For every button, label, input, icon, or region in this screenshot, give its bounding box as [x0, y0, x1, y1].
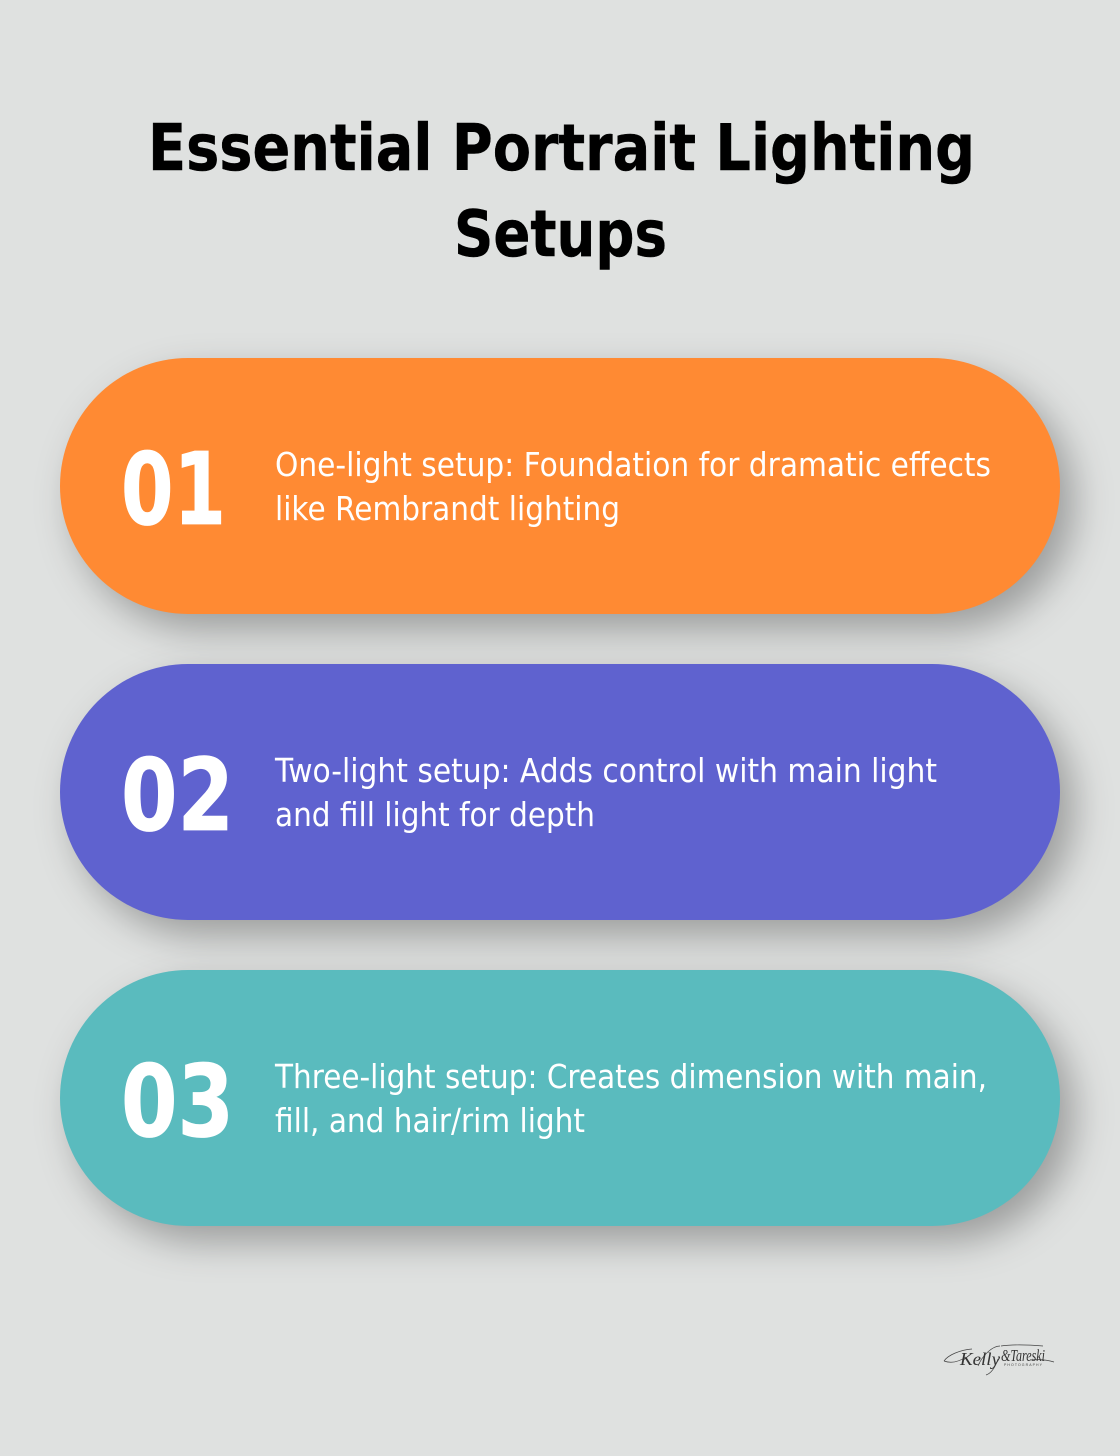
description: one-light setup: like Rembrandt lighting	[275, 489, 620, 528]
panel: two-light setup	[60, 664, 1074, 936]
description: two-light setup: and fill light for depth	[275, 795, 595, 834]
description: one-light setup	[275, 445, 991, 528]
panel: one-light setup	[60, 358, 1074, 630]
number 02: 02	[121, 737, 234, 854]
description: one-light setup: One-light setup: Foundation for dramatic effects	[275, 445, 991, 484]
logo: signature: PHOTOGRAPHY	[1004, 1363, 1043, 1367]
description: three-light setup: Three-light setup: Creates dimension with main,	[274, 1057, 987, 1096]
description: three-light setup: fill, and hair/rim light	[275, 1101, 585, 1140]
title	[148, 112, 975, 272]
logo: signature	[944, 1345, 1054, 1375]
title: Essential Portrait Lighting	[148, 112, 975, 186]
description: two-light setup	[274, 751, 937, 834]
description: three-light setup	[274, 1057, 987, 1140]
description: two-light setup: Two-light setup: Adds control with main light	[274, 751, 937, 790]
title: Setups	[454, 198, 667, 272]
logo: signature: &Tareski	[1001, 1346, 1045, 1365]
number 03: 03	[121, 1043, 234, 1160]
number 01: 01	[121, 431, 226, 548]
logo: signature: Kelly	[959, 1349, 1000, 1369]
panel: three-light setup	[60, 970, 1074, 1242]
